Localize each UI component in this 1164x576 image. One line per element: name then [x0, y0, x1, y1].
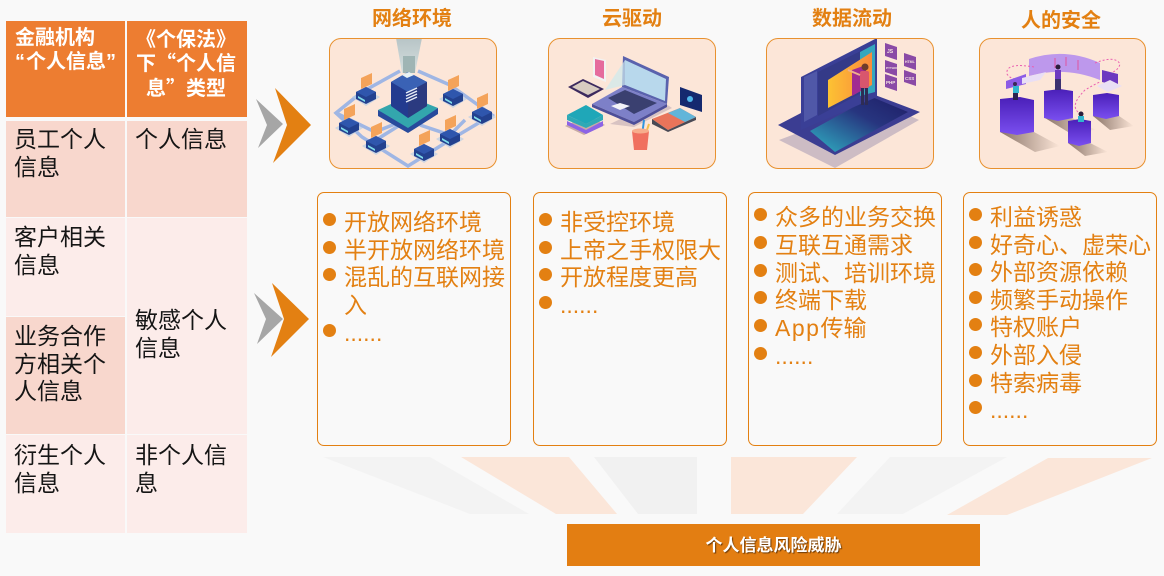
cell: non personal information: [127, 435, 247, 533]
row: customer related information: 客户相关: [14, 224, 106, 250]
cell: non personal information: 非个人信: [135, 442, 227, 468]
list item: 外部入侵: [990, 342, 1082, 368]
panel: network illustration: [329, 38, 497, 169]
list item (wrapped over two lines): [323, 264, 505, 318]
heading: data flow: 数据流动: [812, 8, 892, 30]
header: financial institution personal information: “: [15, 51, 25, 73]
header: financial institution personal information: 个人信息: [26, 51, 106, 73]
list item: ellipsis: [539, 292, 598, 318]
row: business partner personal information: [6, 317, 125, 434]
icon: person at giant tablet: HTML: [905, 60, 916, 64]
row: customer related information: 信息: [14, 252, 60, 278]
funnel: converging bands: [461, 457, 1152, 515]
list item: 非受控环境: [560, 209, 675, 235]
row: derived personal information: 衍生个人: [14, 442, 106, 468]
list item: App传输: [775, 315, 866, 341]
cell: non personal information: 息: [135, 470, 158, 496]
header: PIPL personal information type: 息”类型: [146, 72, 226, 101]
cell: sensitive personal information: [127, 218, 247, 434]
list item: 半开放网络环境: [344, 237, 505, 263]
list item: 频繁手动操作: [990, 287, 1128, 313]
header: financial institution personal information: ”: [106, 51, 116, 73]
list item: ellipsis: ......: [990, 397, 1028, 423]
heading: cloud driven: 云驱动: [602, 8, 662, 30]
list item: 特权账户: [990, 314, 1082, 340]
list item: ellipsis: [969, 397, 1028, 423]
table: personal information types: [6, 21, 247, 533]
list item: 外部资源依赖: [990, 259, 1128, 285]
list item: 开放程度更高: [560, 264, 698, 290]
panel: data flow list: [748, 192, 942, 446]
row: business partner personal information: 方相关个: [14, 351, 106, 377]
row: business partner personal information: 人信息: [14, 378, 83, 404]
cell: personal information: 个人信息: [135, 126, 227, 152]
icon: server network: [333, 39, 496, 168]
list item: 利益诱惑: [990, 204, 1082, 230]
header: PIPL personal information type: 下“个人信: [136, 47, 236, 76]
header: financial institution personal information: [6, 21, 125, 117]
icon: person at giant tablet: PYTHON: [886, 66, 899, 70]
cell: personal information: [127, 121, 247, 217]
list item: ellipsis: ......: [344, 320, 382, 346]
list item: ellipsis: ......: [775, 343, 813, 369]
row: employee personal information: 员工个人: [14, 126, 106, 152]
row: derived personal information: 信息: [14, 470, 60, 496]
arrow: lower chevrons: [254, 283, 309, 357]
panel: human security illustration: [979, 38, 1146, 169]
list item: 特索病毒: [990, 370, 1082, 396]
panel: network environment list: [317, 192, 511, 446]
list item (wrapped over two lines): 混乱的互联网接: [344, 264, 505, 290]
list item: 开放网络环境: [344, 209, 482, 235]
panel: data flow illustration: [766, 38, 934, 169]
header: financial institution personal information: 金融机构: [15, 27, 95, 49]
icon: person at giant tablet: JS: [887, 49, 894, 55]
list item: 好奇心、虚荣心: [990, 232, 1151, 258]
row: business partner personal information: 业务合作: [14, 323, 106, 349]
cell: sensitive personal information: 敏感个人: [135, 307, 227, 333]
header: PIPL personal information type: [127, 21, 247, 117]
list item: 上帝之手权限大: [560, 237, 721, 263]
list item: ellipsis: [323, 320, 382, 346]
list item: ellipsis: [754, 343, 813, 369]
row: employee personal information: [6, 121, 125, 217]
row: derived personal information: [6, 435, 125, 533]
heading: network environment: 网络环境: [372, 8, 452, 30]
row: employee personal information: 信息: [14, 154, 60, 180]
icon: person at giant tablet: [778, 39, 920, 168]
panel: human security list: [963, 192, 1157, 446]
header: PIPL personal information type: 《个保法》: [136, 23, 236, 52]
list item: 众多的业务交换: [775, 204, 936, 230]
list item: 测试、培训环境: [775, 260, 936, 286]
arrow: upper chevrons: [256, 88, 311, 163]
list item: 终端下载: [775, 287, 867, 313]
heading: human security: 人的安全: [1021, 10, 1101, 32]
list item: ellipsis: ......: [560, 292, 598, 318]
banner: personal information risk threats: 个人信息风险威胁: [706, 536, 842, 555]
icon: laptop with devices: [565, 56, 702, 150]
panel: cloud driven list: [533, 192, 727, 446]
panel: cloud illustration: [548, 38, 716, 169]
icon: person at giant tablet: PHP: [886, 80, 895, 85]
icon: person at giant tablet: CSS: [905, 76, 914, 81]
list item (wrapped over two lines): 入: [344, 292, 367, 318]
cell: sensitive personal information: 信息: [135, 335, 181, 361]
banner: personal information risk threats: [567, 524, 980, 566]
row: customer related information: [6, 218, 125, 316]
list item: 互联互通需求: [775, 232, 913, 258]
icon: people on pillars: [1000, 54, 1131, 156]
